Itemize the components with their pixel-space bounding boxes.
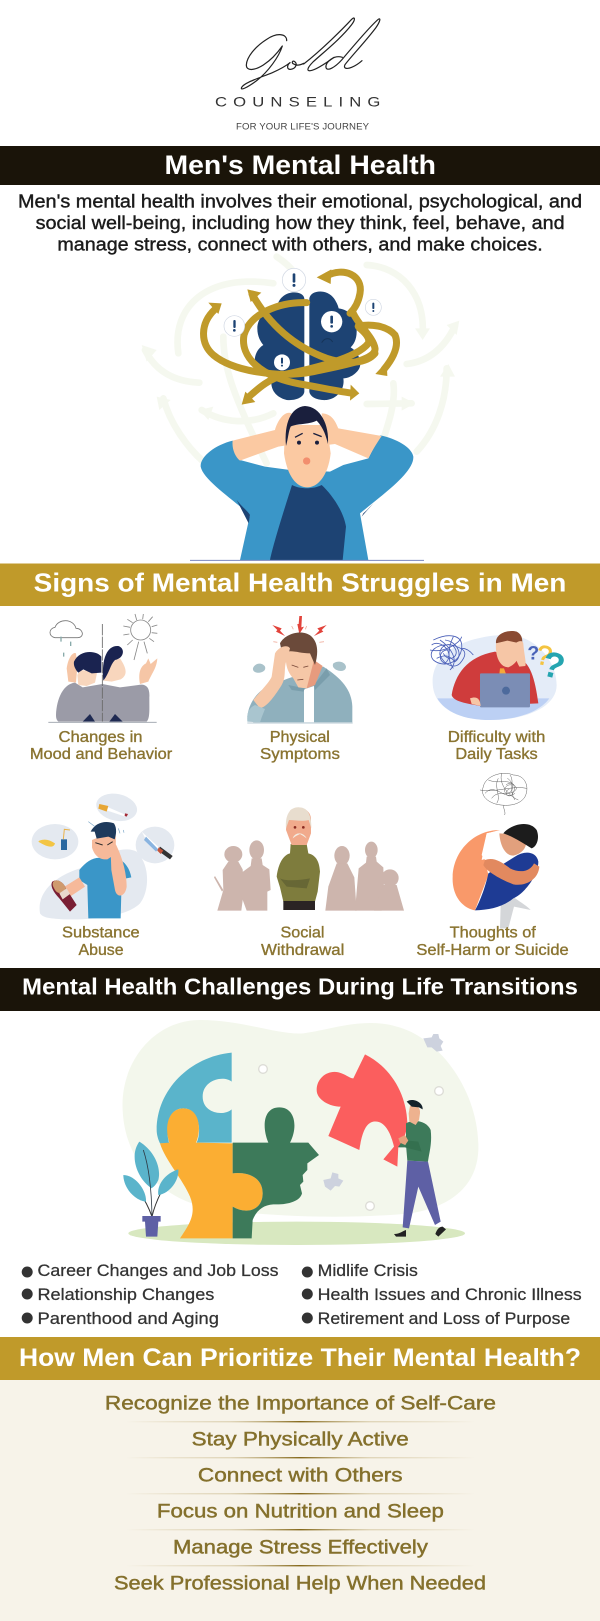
man: arms: [232, 413, 292, 461]
heading bar: Signs of Mental Health Struggles in Men: [0, 564, 600, 606]
sign: Changes in Mood and Behavior: [30, 614, 172, 763]
panel: ways to prioritize mental health: Manage Stress Effectively: [173, 1536, 428, 1558]
left column: [22, 1262, 278, 1328]
icon: confused man at laptop: ?: [527, 643, 539, 664]
heading bar: How Men Can Prioritize Their Mental Health?: How Men Can Prioritize Their Mental Health?: [19, 1344, 581, 1372]
sign: Thoughts of Self-Harm or Suicide: [416, 773, 569, 959]
heading bar: Mental Health Challenges During Life Transitions: Mental Health Challenges During Life Transitions: [22, 974, 578, 1000]
left column: Relationship Changes: [38, 1286, 214, 1304]
panel: ways to prioritize mental health: Stay Physically Active: [192, 1428, 409, 1450]
heading bar: Signs of Mental Health Struggles in Men: Signs of Mental Health Struggles in Men: [34, 568, 566, 598]
decorative pieces: [323, 1034, 443, 1191]
label: Substance: [62, 924, 140, 942]
panel: ways to prioritize mental health: Focus on Nutrition and Sleep: [157, 1500, 444, 1522]
logo: Gold Counseling: [215, 18, 386, 133]
panel: ways to prioritize mental health: Connect with Others: [198, 1464, 403, 1486]
heading bar: Men's Mental Health: [0, 146, 600, 185]
label: Changes in: [58, 729, 142, 746]
sign: Thoughts of Self-Harm or Suicide: Self-Harm or Suicide: [416, 942, 569, 959]
heading bar: Men's Mental Health: Men's Mental Health: [164, 150, 436, 180]
brain: [255, 291, 360, 400]
sign: Difficulty with Daily Tasks: Daily Tasks: [455, 746, 538, 763]
icon: split mood: [48, 614, 157, 722]
man arm behind: [389, 1127, 407, 1147]
tangled gold arrows: [204, 272, 397, 397]
panel: ways to prioritize mental health: Seek Professional Help When Needed: [114, 1572, 486, 1594]
intro paragraph: manage stress, connect with others, and make choices.: [57, 234, 543, 254]
intro paragraph: [18, 192, 582, 254]
sign: Difficulty with Daily Tasks: [430, 631, 569, 763]
left column: Parenthood and Aging: [38, 1310, 219, 1328]
alert bubbles: [224, 268, 381, 370]
label: Social: [280, 924, 324, 942]
sign: Physical Symptoms: [247, 616, 353, 763]
sign: Substance Abuse: [32, 790, 174, 959]
red piece: [317, 1054, 407, 1167]
icon: headache man: [247, 616, 353, 723]
green piece: [233, 1107, 319, 1238]
label: Physical: [270, 729, 330, 746]
background blob: [123, 1020, 478, 1217]
logo wordmark: COUNSELING: [215, 95, 386, 110]
icon: curled up man with tangled thoughts: [453, 773, 539, 928]
icon: confused man at laptop: ?: [538, 643, 569, 688]
heading bar: Mental Health Challenges During Life Transitions: [0, 968, 600, 1011]
icon: man with substances: [32, 790, 174, 919]
blue piece: [157, 1053, 232, 1143]
right column: [302, 1262, 582, 1328]
sign: Social Withdrawal: [214, 807, 404, 959]
label: Difficulty with: [448, 729, 545, 746]
right column: Retirement and Loss of Purpose: [318, 1310, 570, 1328]
panel: ways to prioritize mental health: Recognize the Importance of Self-Care: [105, 1392, 496, 1414]
arrowheads: [208, 269, 387, 405]
heading bar: How Men Can Prioritize Their Mental Health?: [0, 1337, 600, 1380]
icon: confused man at laptop: ?: [534, 639, 555, 672]
bullet list: life transitions: [22, 1262, 582, 1328]
right column: Health Issues and Chronic Illness: [318, 1286, 582, 1304]
right column: Midlife Crisis: [318, 1262, 418, 1280]
intro paragraph: Men's mental health involves their emotional, psychological, and: [18, 192, 582, 212]
left column: Career Changes and Job Loss: [38, 1262, 278, 1280]
ground: [128, 1222, 465, 1245]
potted plant: [123, 1142, 178, 1237]
illustration: puzzle head: [123, 1020, 478, 1245]
man: head: [284, 425, 331, 487]
icon: confused man at laptop: [430, 631, 569, 720]
orange piece: [160, 1108, 263, 1238]
man carrying piece: [394, 1100, 446, 1237]
illustration: stressed man with tangled brain: [142, 257, 459, 560]
man: shirt: [270, 485, 346, 560]
sign: Changes in Mood and Behavior: Mood and Behavior: [30, 746, 172, 763]
sign: Substance Abuse: Abuse: [78, 942, 124, 959]
intro paragraph: social well-being, including how they think, feel, behave, and: [36, 213, 565, 233]
logo tagline: FOR YOUR LIFE'S JOURNEY: [236, 122, 370, 132]
logo script mark: [241, 18, 380, 89]
sign: Social Withdrawal: Withdrawal: [261, 942, 344, 959]
sign: Physical Symptoms: Symptoms: [260, 746, 340, 763]
panel: ways to prioritize mental health: [0, 1380, 600, 1621]
man: jacket: [201, 435, 413, 560]
icon: isolated man among silhouettes: [214, 807, 404, 911]
faint background arrows: [142, 257, 459, 463]
label: Thoughts of: [450, 924, 537, 942]
